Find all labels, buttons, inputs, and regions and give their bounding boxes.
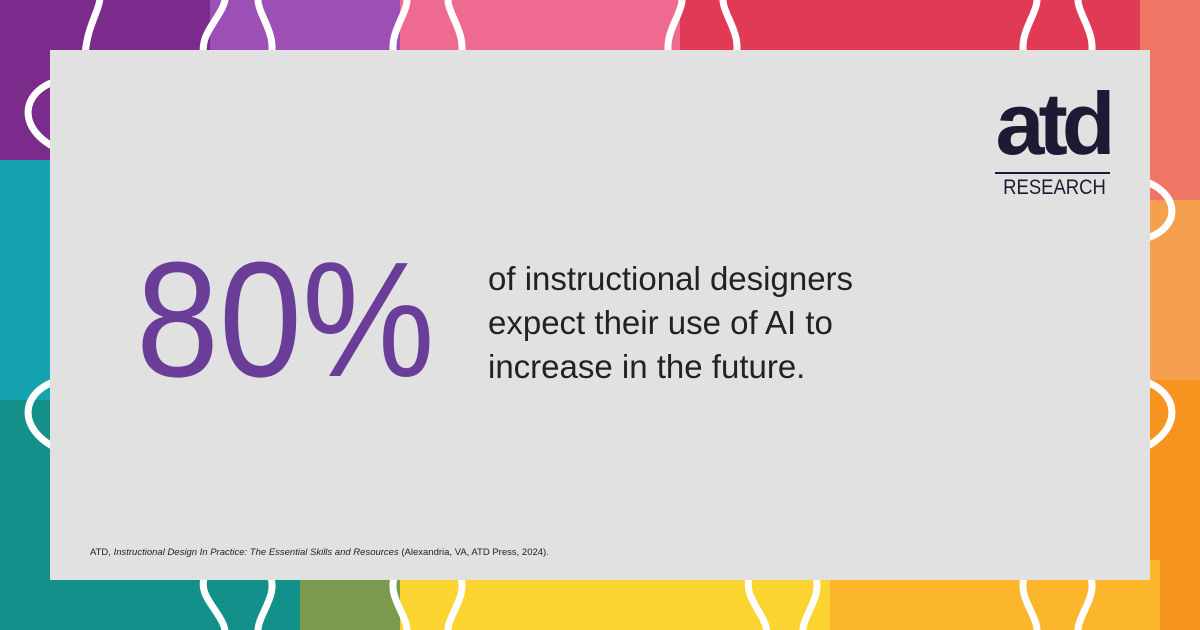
source footnote: ATD, Instructional Design In Practice: The Essential Skills and Resources (Alexandria, VA, ATD Press, 2024). (90, 547, 549, 558)
big stat 80%: 80% (136, 228, 435, 411)
logo: atd research: atd (996, 74, 1110, 173)
stat description (488, 260, 853, 385)
logo: atd research: RESEARCH (1003, 176, 1106, 199)
stat description: increase in the future. (488, 348, 805, 385)
stat description: expect their use of AI to (488, 304, 833, 341)
stat description: of instructional designers (488, 260, 853, 297)
main panel (50, 50, 1150, 580)
